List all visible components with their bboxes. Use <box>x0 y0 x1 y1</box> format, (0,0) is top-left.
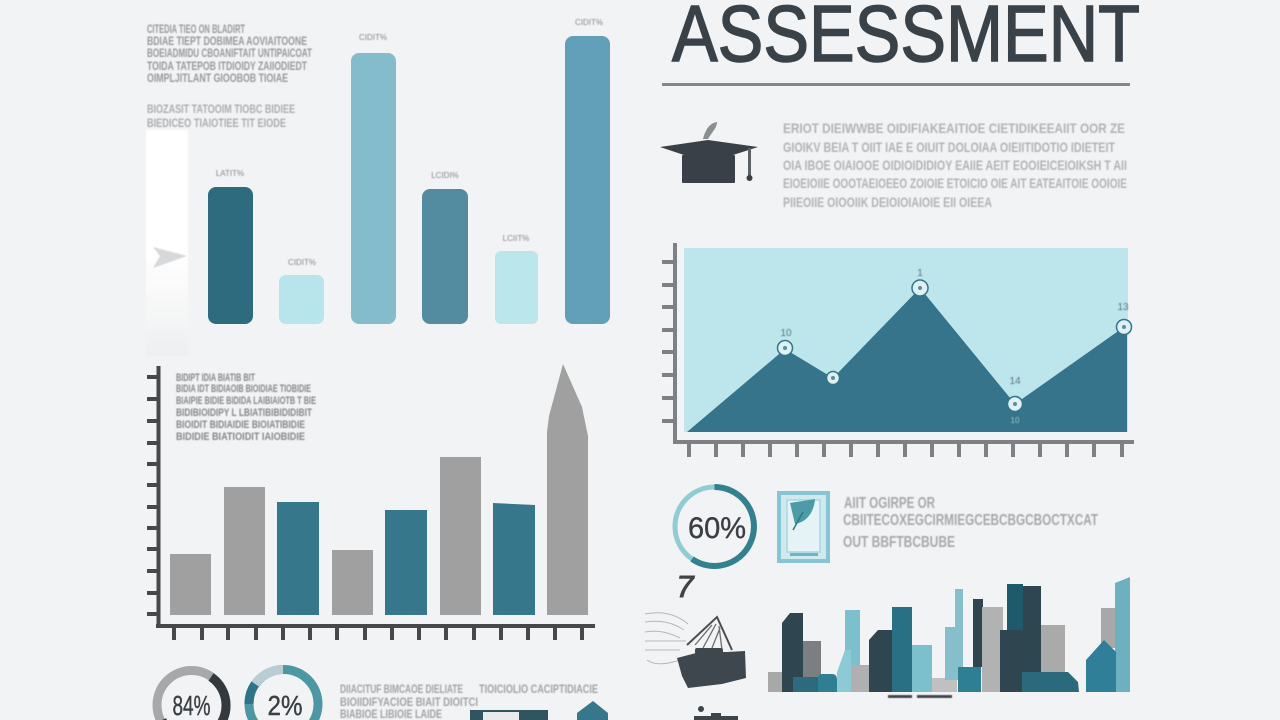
bar 5: LCIIT% <box>503 234 529 243</box>
text block: beside picture: AIIT OGIRPE OR <box>844 495 935 512</box>
text block: top left intro: BIEDICEO TIAIOTIEE TIT EIODE <box>147 116 286 130</box>
text block: top left intro: BIOZASIT TATOOIM TIOBC BIDIEE <box>147 102 295 116</box>
text block: bottom middle <box>340 682 598 720</box>
icon: graduation cap <box>660 122 758 183</box>
icon: paper plane <box>153 247 187 268</box>
icon: teal hexagon <box>577 701 608 720</box>
bar 6 <box>565 18 610 324</box>
text block: top left intro: BOEIADMIDU CBOANIFTAIT UNTIPAICOAT <box>147 46 312 60</box>
text block: bottom middle: TIOICIOLIO CACIPTIDIACIE <box>479 682 598 696</box>
bar 4: LCIDI% <box>431 171 459 180</box>
marker centres <box>783 286 1126 406</box>
text block: chart note: BIDIPT IDIA BIATIB BIT <box>176 372 255 384</box>
text block: top left intro: OIMPLJITLANT GIOOBOB TIOIAE <box>147 71 288 85</box>
bar 6: CIDIT% <box>575 18 603 27</box>
text block: chart note: BIDIA IDT BIDIAOIB BIOIDIAE TIOBIDIE <box>176 383 311 395</box>
donut: second percentage <box>249 670 318 720</box>
y axis <box>147 366 158 628</box>
text block: top right description: ERIOT DIEIWWBE OIDIFIAKEAITIOE CIETIDIKEEAIIT OOR ZE <box>783 120 1125 136</box>
data markers <box>778 280 1132 412</box>
text block: bottom middle: DIIACITUF BIMCAOE DIELIATE <box>340 682 463 696</box>
text block: top left intro: TOIDA TATEPOB ITDIOIDY ZAIIODIEDT <box>147 59 307 73</box>
data labels <box>780 268 1129 425</box>
bar 4 <box>422 171 468 324</box>
bar 1: LATIT% <box>216 169 244 178</box>
bar 3 <box>351 33 396 324</box>
x axis <box>156 626 595 640</box>
skyline caption <box>888 695 952 698</box>
data labels: 10 <box>780 328 792 339</box>
axes <box>662 243 1134 457</box>
text block: chart note: BIAIPIE BIDIE BIDIDA LAIBIAIOTB T BIE <box>176 395 316 407</box>
area <box>687 288 1127 432</box>
text block: beside picture: CBIITECOXEGCIRMIEGCEBCBGCBOCTXCAT <box>843 512 1098 529</box>
icon: framed leaf picture <box>779 493 828 561</box>
data labels: 1 <box>917 268 923 279</box>
text block: beside picture <box>843 495 1098 551</box>
icon: dark box <box>470 710 548 720</box>
text block: top left intro: BDIAE TIEPT DOBIMEA AOVIAITOONE <box>147 34 307 48</box>
icon: bottom cut-off object <box>694 706 738 720</box>
text block: top right description <box>783 120 1127 210</box>
numeral seven: 7 <box>676 569 695 604</box>
bars <box>170 364 588 615</box>
plot background <box>684 248 1128 432</box>
bar 3: CIDIT% <box>359 33 387 42</box>
bar 2: CIDIT% <box>288 258 316 267</box>
data labels: 10 <box>1011 416 1020 425</box>
text block: top right description: OIA IBOE OIAIOOE OIDIOIDIDIOY EAIIE AEIT EOOIEICEIOIKSH T AII <box>783 157 1127 173</box>
bar chart: grey and teal with axes <box>147 364 595 640</box>
bar 2 <box>279 258 324 324</box>
bar chart: rounded teal bars <box>208 18 610 324</box>
white strip with paper plane <box>146 130 188 356</box>
text block: top right description: PIIEOIIE OIOOIIK DEIOIOIAIOIE EII OIEEA <box>783 194 992 210</box>
text block: top left intro <box>147 22 312 130</box>
title rule <box>662 83 1130 86</box>
text block: chart note: BIDIDIE BIATIOIDIT IAIOBIDIE <box>176 431 305 443</box>
icon: ship with lines <box>645 613 746 688</box>
text block: top right description: GIOIKV BEIA T OIIT IAE E OIUIT DOLOIAA OIEIITIDOTIO IDIETEIT <box>783 139 1115 155</box>
data labels: 13 <box>1117 302 1129 313</box>
donut: 60 percent: 60% <box>688 512 746 545</box>
text block: beside picture: OUT BBFTBCBUBE <box>843 534 955 551</box>
text block: chart note: BIDIBIOIDIPY L LBIATIBIBIDIDIBIT <box>176 407 312 419</box>
text block: top left intro: CITEDIA TIEO ON BLADIRT <box>147 22 245 36</box>
donut: 60 percent <box>675 487 754 566</box>
donut: first percentage <box>157 670 226 720</box>
bar 1 <box>208 169 253 324</box>
text block: chart note <box>176 372 316 443</box>
text block: top right description: EIOEIOIIE OOOTAEIOEEO ZOIOIE ETOICIO OIE AIT EATEAITOIE OOIOIE <box>783 175 1127 191</box>
area chart <box>662 243 1134 457</box>
text block: chart note: BIOIDIT BIDIAIDIE BIOIATIBIDIE <box>176 419 305 431</box>
data labels: 14 <box>1009 376 1021 387</box>
text block: bottom middle: BIOIIDIFYACIOE BIAIT DIOITCI <box>340 695 478 709</box>
bar 5 <box>495 234 538 324</box>
city skyline chart <box>768 577 1130 698</box>
